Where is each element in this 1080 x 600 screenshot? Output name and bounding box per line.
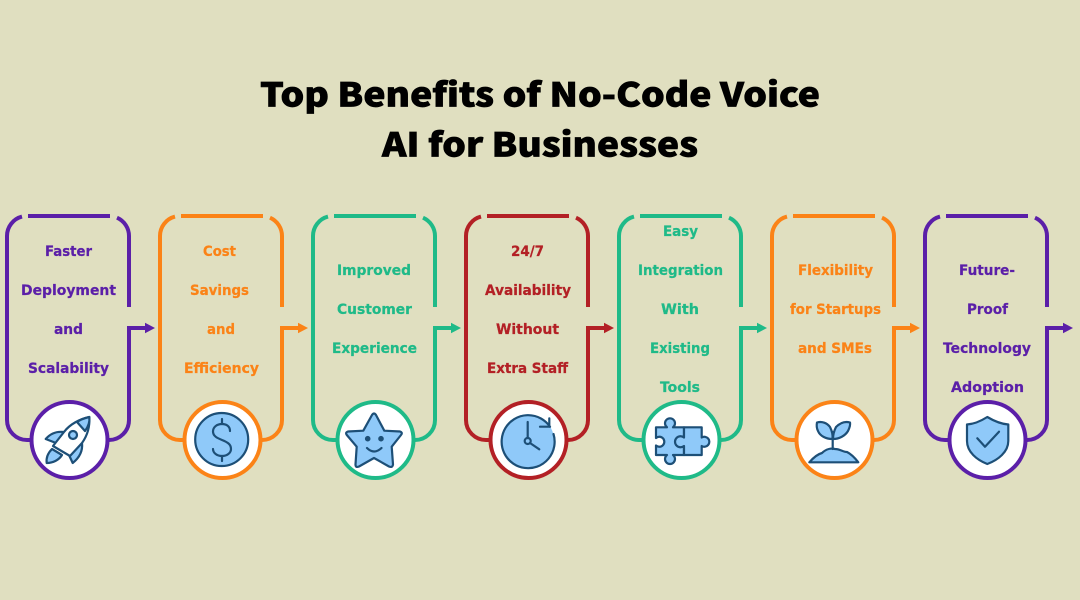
text: label — [184, 244, 260, 377]
panel: Easy Integration With Existing Tools — [619, 216, 767, 478]
arrow head — [604, 323, 614, 333]
arrow head — [298, 323, 308, 333]
panel: Future-Proof Technology Adoption — [925, 216, 1073, 478]
text: label: Future- — [959, 263, 1015, 279]
text: label: Existing — [650, 341, 710, 357]
text: label — [485, 244, 572, 377]
text: label — [332, 263, 417, 357]
text: label: Integration — [638, 263, 723, 279]
text: label: and — [54, 322, 83, 338]
text: label: and SMEs — [798, 341, 872, 357]
text: label: With — [661, 302, 699, 318]
panel: Improved Customer Experience — [313, 216, 461, 478]
text: label — [943, 263, 1032, 396]
text: label: Technology — [943, 341, 1032, 357]
arrow head — [145, 323, 155, 333]
text: label: Cost — [203, 244, 236, 260]
icon: clock — [490, 402, 566, 478]
text: label: Flexibility — [798, 263, 873, 279]
text: label — [21, 244, 116, 377]
icon: sprout — [796, 402, 872, 478]
text: label: Experience — [332, 341, 417, 357]
text: label: Availability — [485, 283, 572, 299]
arrow head — [1063, 323, 1073, 333]
panel: Flexibility for Startups and SMEs — [772, 216, 920, 478]
text: label: Extra Staff — [487, 361, 568, 377]
text: label — [638, 224, 723, 396]
arrow head — [451, 323, 461, 333]
text: label: Without — [496, 322, 559, 338]
arrow head — [910, 323, 920, 333]
text: label: Scalability — [28, 361, 110, 377]
text: label: Easy — [663, 224, 698, 240]
text: label: Efficiency — [184, 361, 260, 377]
title: Top Benefits of No-Code Voice — [260, 68, 820, 116]
text: label: Improved — [337, 263, 411, 279]
panel: Cost Savings and Efficiency — [160, 216, 308, 478]
text: label: Deployment — [21, 283, 116, 299]
title: AI for Businesses — [381, 118, 698, 166]
icon: dollar coin — [184, 402, 260, 478]
text: label: for Startups — [790, 302, 881, 318]
text: label: and — [207, 322, 235, 338]
icon: smiling star — [338, 402, 414, 478]
text: label: Faster — [45, 244, 93, 260]
icon: puzzle pieces — [644, 402, 720, 478]
text: label: Tools — [660, 380, 700, 396]
icon: rocket — [32, 402, 108, 478]
text: label: Proof — [967, 302, 1009, 318]
text: label: 24/7 — [511, 244, 544, 260]
title — [260, 68, 820, 166]
panel: Faster Deployment and Scalability — [7, 216, 155, 478]
arrow head — [757, 323, 767, 333]
text: label: Adoption — [951, 380, 1024, 396]
panel: 24/7 Availability Without Extra Staff — [466, 216, 614, 478]
text: label — [790, 263, 881, 357]
icon: shield check — [950, 402, 1026, 478]
text: label: Customer — [337, 302, 413, 318]
text: label: Savings — [190, 283, 249, 299]
